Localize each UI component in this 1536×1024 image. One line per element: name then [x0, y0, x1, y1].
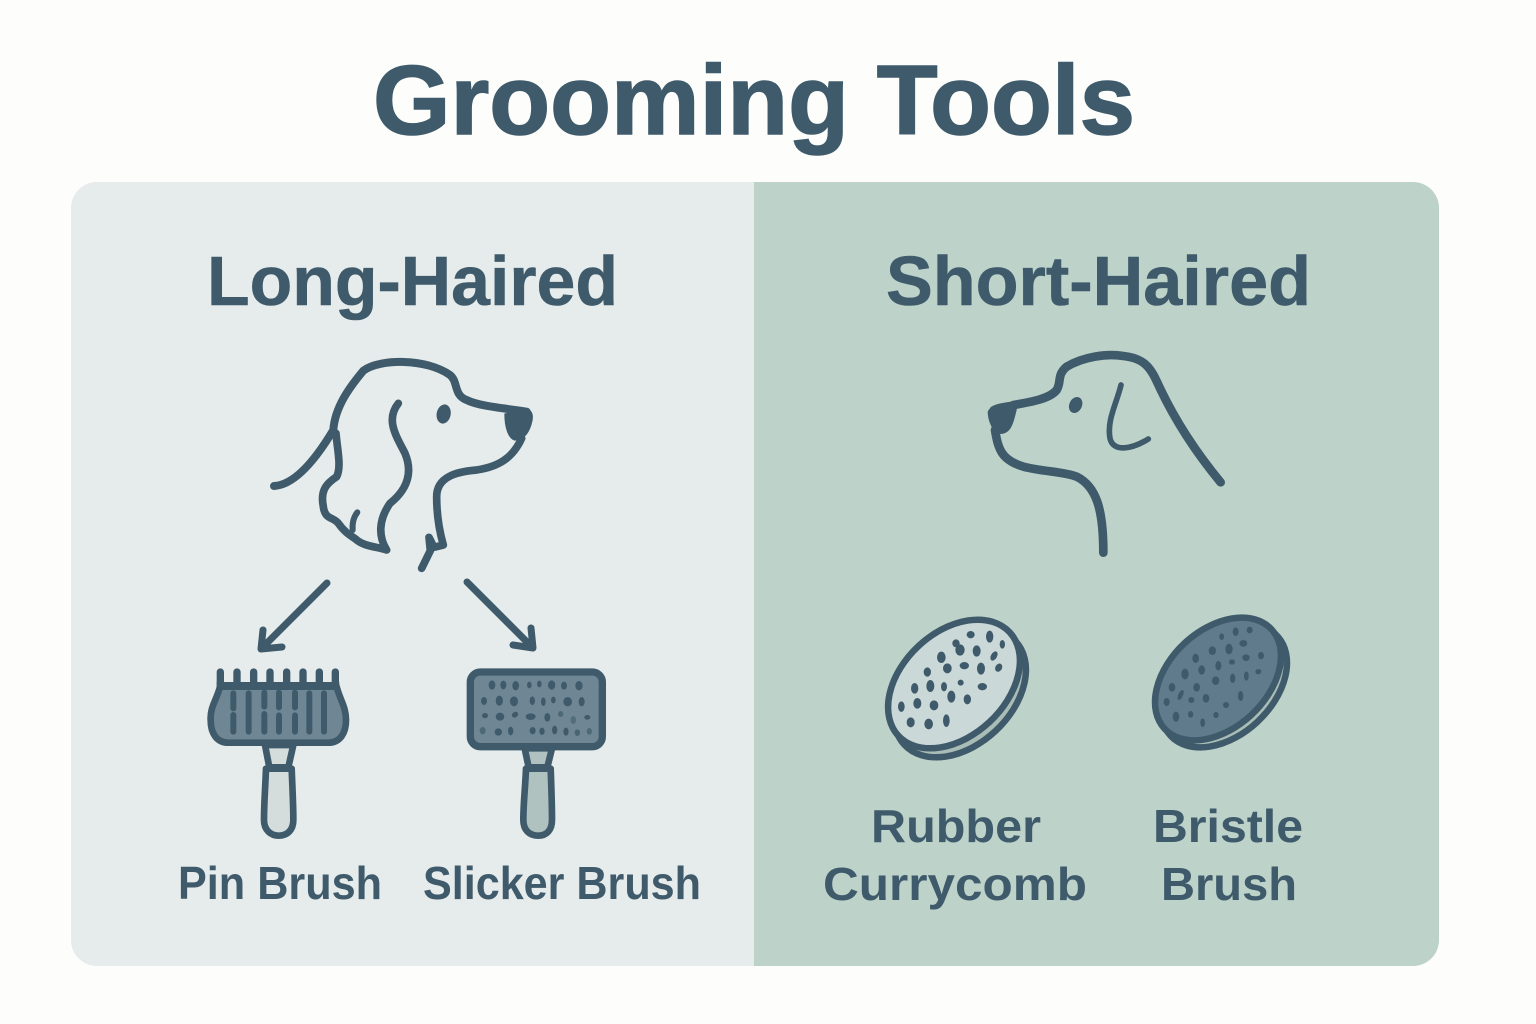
icon: rubber currycomb	[863, 594, 1051, 783]
label: bristle brush	[1153, 800, 1303, 910]
icon: slicker brush	[470, 672, 602, 836]
label: rubber currycomb	[823, 800, 1087, 910]
icon: short-haired dog	[988, 355, 1221, 553]
panel: short-haired	[754, 182, 1439, 966]
heading: short-haired: Short-Haired	[886, 242, 1311, 320]
label: rubber currycomb: Rubber	[871, 800, 1041, 852]
label: rubber currycomb: Currycomb	[823, 858, 1087, 910]
panel background: short-haired	[754, 182, 1439, 966]
label: bristle brush: Brush	[1161, 858, 1297, 910]
panel: long-haired	[71, 182, 754, 966]
title: Grooming Tools	[373, 45, 1135, 155]
arrow: to pin brush	[261, 583, 327, 649]
icon: long-haired dog	[274, 362, 532, 568]
label: bristle brush: Bristle	[1153, 800, 1303, 852]
icon: pin brush	[211, 672, 346, 836]
label: pin brush: Pin Brush	[178, 857, 382, 909]
arrow: to slicker brush	[467, 582, 533, 648]
label: slicker brush: Slicker Brush	[423, 857, 701, 909]
panel background: long-haired	[71, 182, 754, 966]
heading: long-haired: Long-Haired	[207, 242, 618, 320]
icon: bristle brush	[1131, 593, 1311, 772]
